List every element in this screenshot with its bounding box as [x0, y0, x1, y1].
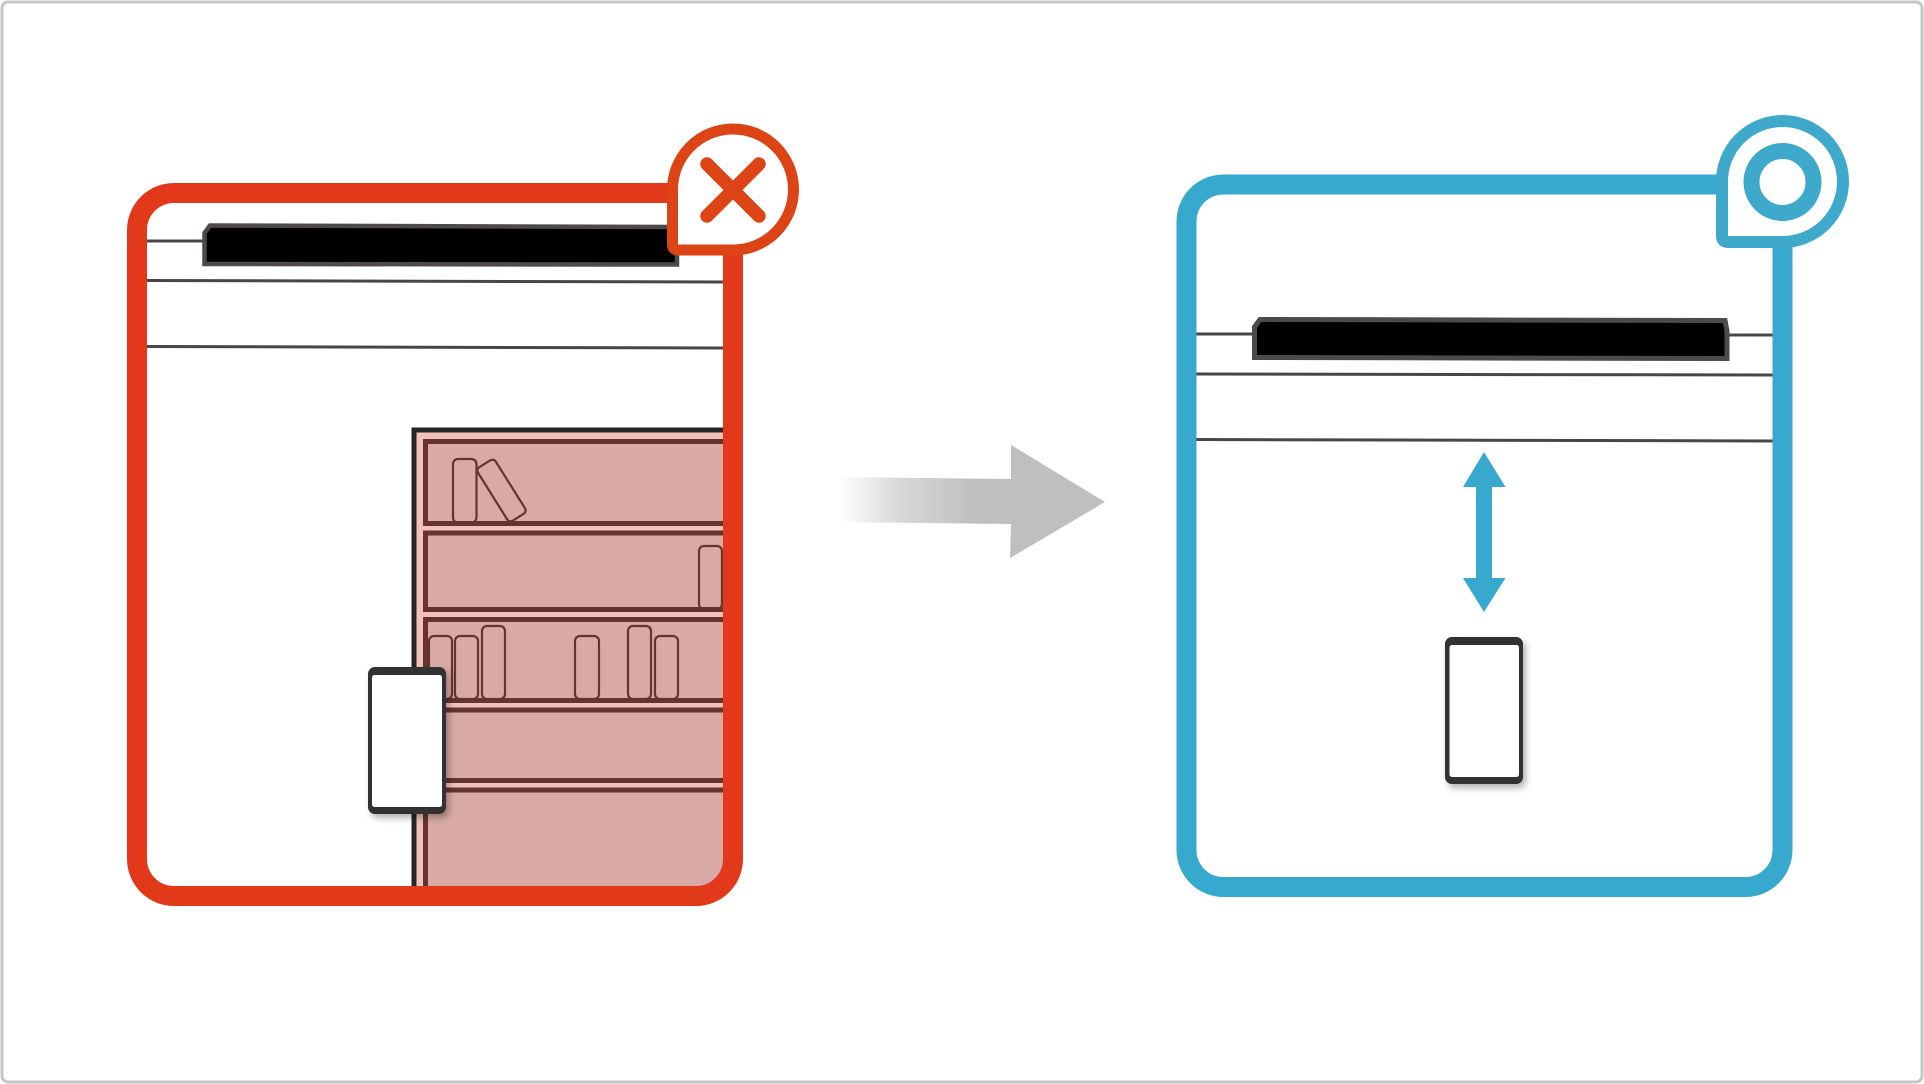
- red frame: [137, 193, 733, 896]
- phone (right): [1445, 637, 1523, 784]
- icon: cross badge: [672, 129, 793, 250]
- phone (left): [368, 667, 446, 814]
- arrow: transition: [840, 445, 1105, 558]
- double-headed arrow: [1463, 452, 1506, 612]
- black bar (right): [1254, 320, 1727, 358]
- icon: circle badge: [1722, 121, 1843, 242]
- bookshelf: [414, 430, 736, 910]
- horizontal wall lines (right): [1196, 334, 1773, 441]
- blue frame: [1186, 184, 1782, 887]
- horizontal wall lines (left): [147, 241, 723, 348]
- panel: incorrect placement (red): [137, 129, 793, 910]
- books: [429, 458, 722, 699]
- black bar (left): [204, 226, 677, 264]
- panel: correct placement (blue): [1186, 121, 1843, 887]
- shelf carcass: [414, 430, 736, 910]
